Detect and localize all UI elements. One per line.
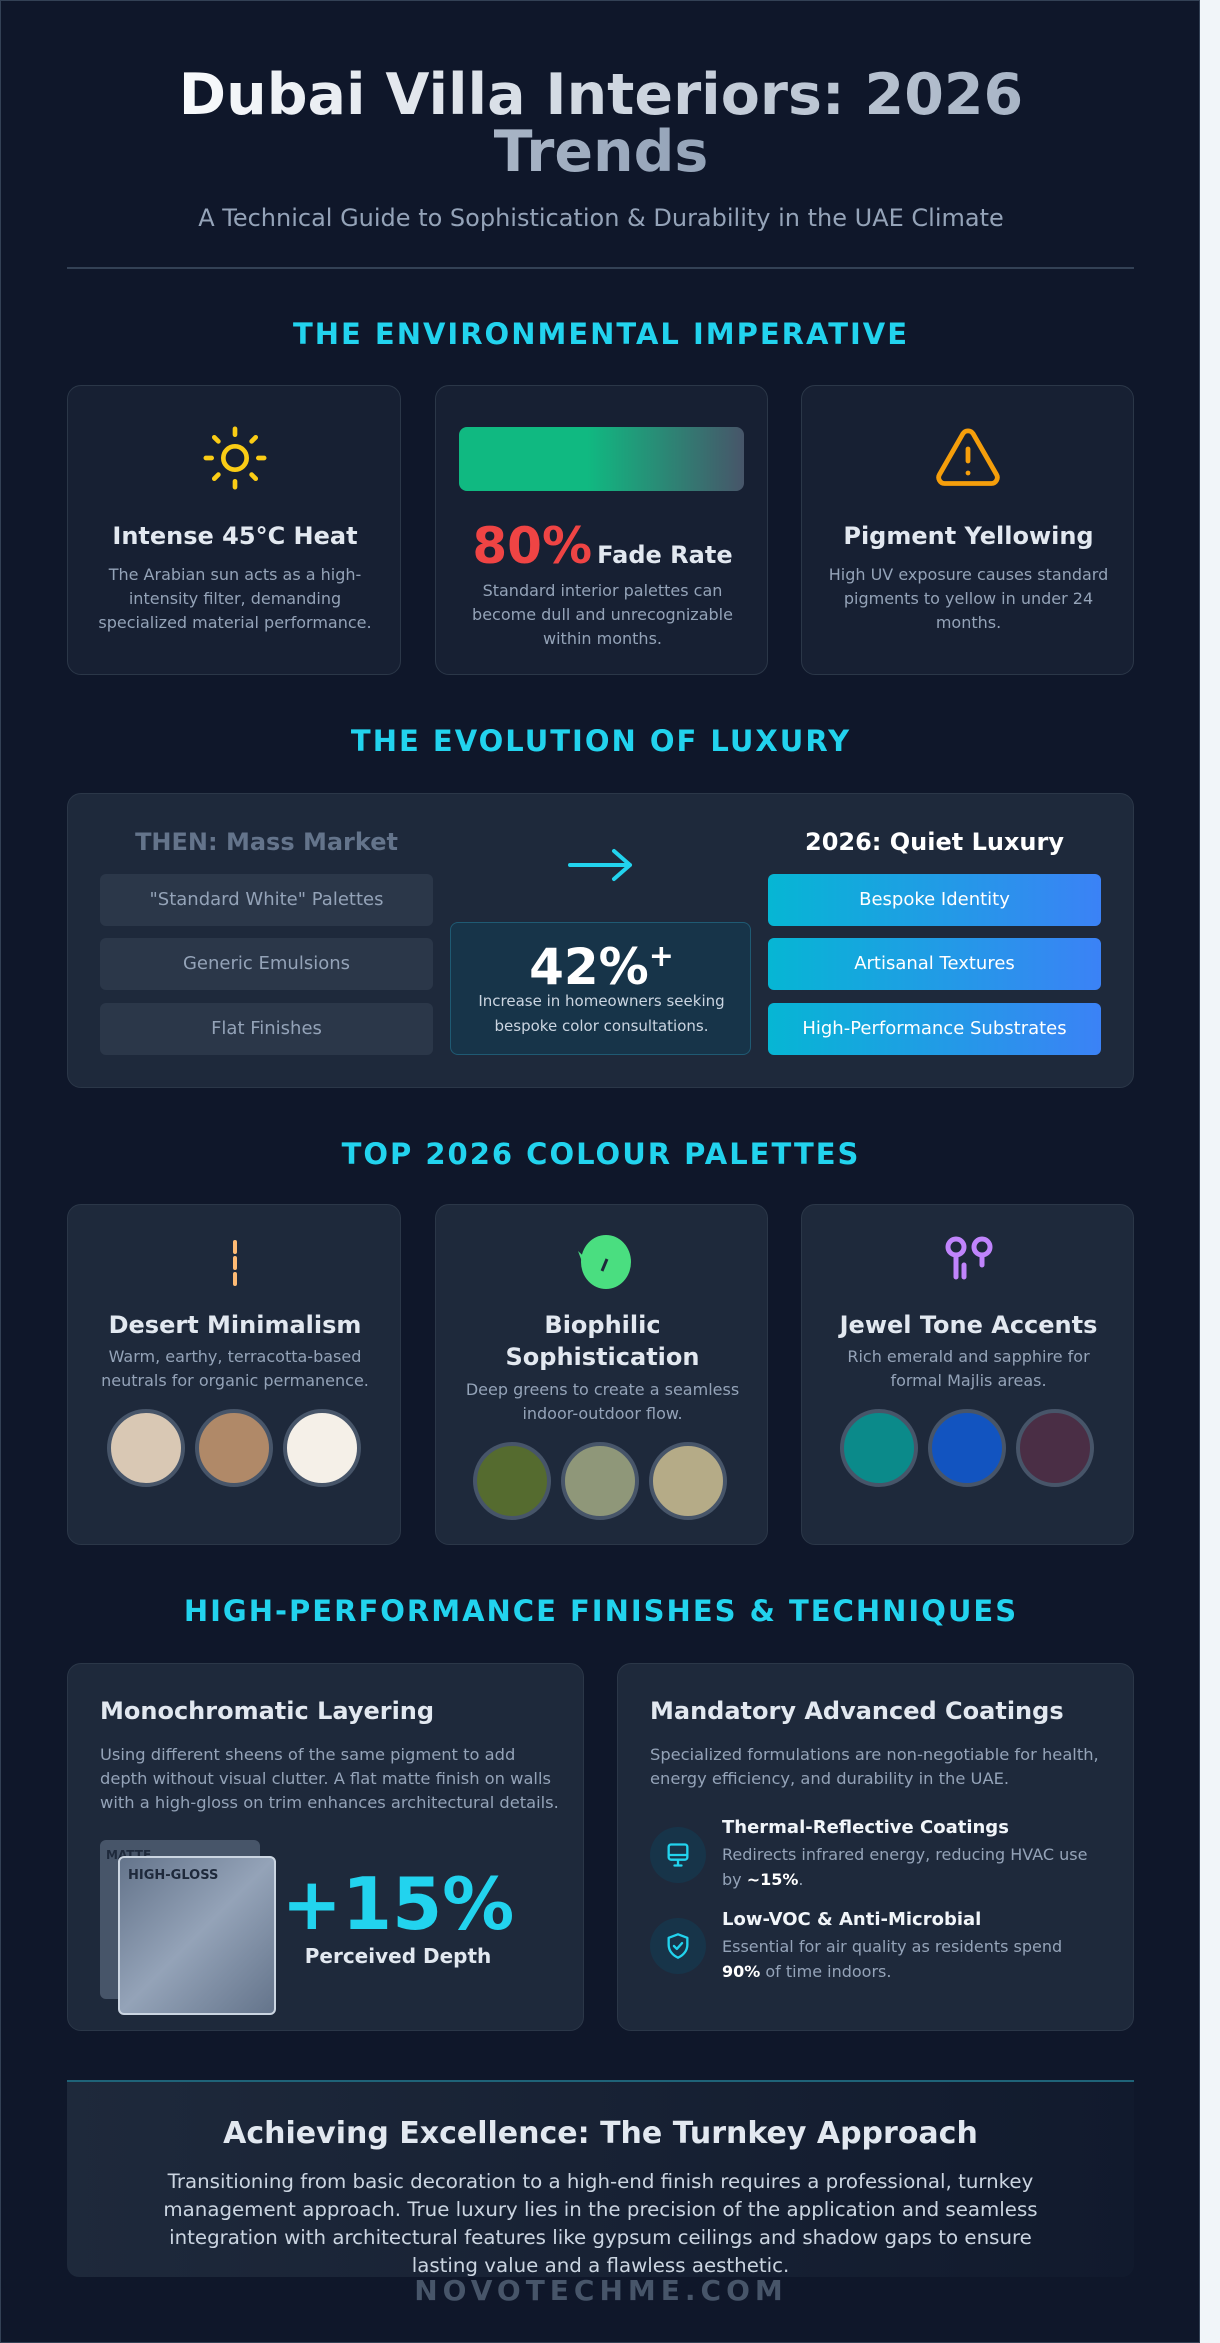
item: [100, 938, 433, 990]
card text: Deep greens to create a seamless: [466, 1380, 739, 1399]
item: low-voc: [650, 1909, 1062, 1981]
now column: [768, 828, 1101, 1055]
arrow: [568, 848, 632, 882]
card text: [650, 1745, 1099, 1788]
card text: become dull and unrecognizable: [472, 605, 733, 624]
card text: [466, 1380, 739, 1423]
card text: [829, 565, 1108, 632]
footer text: integration with architectural features like gypsum ceilings and shadow gaps to ensure: [169, 2226, 1032, 2249]
card text: specialized material performance.: [98, 613, 372, 632]
swatches: [840, 1409, 1094, 1487]
panel: fade rate: [435, 385, 768, 675]
card text: Rich emerald and sapphire for: [847, 1347, 1090, 1366]
item: Flat Finishes: [211, 1018, 322, 1039]
footer heading: Achieving Excellence: The Turnkey Approach: [223, 2116, 978, 2151]
panel: biophilic: [435, 1204, 768, 1545]
card title: Intense 45°C Heat: [112, 522, 358, 550]
icon: shield: [650, 1918, 706, 1974]
title: [179, 62, 1023, 185]
card text: [98, 565, 372, 632]
icon: dashed line: [233, 1240, 237, 1286]
card title: Jewel Tone Accents: [840, 1311, 1097, 1339]
item: thermal: by ~15%.: [722, 1870, 804, 1889]
card text: intensity filter, demanding: [129, 589, 341, 608]
swatch: matte: [100, 1840, 260, 1999]
swatch: high-gloss: [118, 1856, 276, 2015]
item: thermal: Thermal-Reflective Coatings: [722, 1817, 1009, 1838]
card title: Pigment Yellowing: [843, 522, 1094, 550]
card title: [506, 1311, 699, 1371]
card text: within months.: [543, 629, 662, 648]
card text: neutrals for organic permanence.: [101, 1371, 369, 1390]
item: low-voc: Essential for air quality as residents spend: [722, 1937, 1062, 1956]
card title: Mandatory Advanced Coatings: [650, 1697, 1064, 1725]
card text: formal Majlis areas.: [890, 1371, 1047, 1390]
swatch: matte: MATTE: [106, 1848, 151, 1862]
icon: monitor: [650, 1827, 706, 1883]
footer text: management approach. True luxury lies in the precision of the application and seamless: [163, 2198, 1038, 2221]
swatches: [107, 1409, 361, 1487]
stat box: 42%: Increase in homeowners seeking: [478, 992, 725, 1010]
stat: 80%: 80% Fade Rate: [472, 517, 733, 575]
footer text: [163, 2170, 1038, 2277]
icon: leaf: [578, 1235, 631, 1289]
now heading: 2026: Quiet Luxury: [805, 828, 1064, 856]
card title: Desert Minimalism: [109, 1311, 361, 1339]
card text: Warm, earthy, terracotta-based: [109, 1347, 361, 1366]
card text: [100, 1745, 559, 1812]
item: Artisanal Textures: [854, 953, 1015, 974]
panel: advanced coatings: [617, 1663, 1134, 2031]
section heading: environmental imperative: THE ENVIRONMENTAL IMPERATIVE: [293, 317, 909, 351]
item: Bespoke Identity: [859, 889, 1010, 910]
brand watermark: NOVOTECHME.COM: [414, 2274, 788, 2307]
panel: yellowing: [801, 385, 1134, 675]
stat box: 42%: 42%+: [529, 938, 674, 996]
card text: indoor-outdoor flow.: [522, 1404, 683, 1423]
item: [100, 874, 433, 926]
stat box: 42%: [450, 922, 751, 1055]
subtitle: A Technical Guide to Sophistication & Durability in the UAE Climate: [198, 204, 1004, 232]
panel: monochromatic layering: [67, 1663, 584, 2031]
item: "Standard White" Palettes: [150, 889, 383, 910]
title: Dubai Villa Interiors: 2026: [179, 62, 1023, 128]
footer text: Transitioning from basic decoration to a high-end finish requires a professional, turnkey: [168, 2170, 1033, 2193]
section heading: palettes: TOP 2026 COLOUR PALETTES: [342, 1137, 860, 1171]
item: low-voc: 90% of time indoors.: [722, 1962, 891, 1981]
then heading: THEN: Mass Market: [135, 828, 398, 856]
card text: pigments to yellow in under 24: [844, 589, 1093, 608]
footer callout: turnkey approach: [67, 2080, 1134, 2277]
card text: [847, 1347, 1090, 1390]
item: [768, 874, 1101, 926]
item: High-Performance Substrates: [802, 1018, 1067, 1039]
card text: months.: [936, 613, 1001, 632]
card text: The Arabian sun acts as a high-: [109, 565, 361, 584]
swatch: high-gloss: HIGH-GLOSS: [128, 1868, 218, 1883]
section heading: evolution: THE EVOLUTION OF LUXURY: [351, 724, 851, 758]
item: thermal: Redirects infrared energy, reducing HVAC use: [722, 1845, 1087, 1864]
card text: Using different sheens of the same pigment to add: [100, 1745, 515, 1764]
fade bar: [459, 427, 744, 491]
card text: with a high-gloss on trim enhances architectural details.: [100, 1793, 559, 1812]
stat: +15%: +15%: [282, 1862, 514, 1946]
stat box: 42%: bespoke color consultations.: [495, 1017, 708, 1035]
icon: sun: [204, 426, 266, 490]
item: low-voc: Low-VOC & Anti-Microbial: [722, 1909, 981, 1930]
item: thermal: [650, 1817, 1087, 1889]
stat label: Perceived Depth: [305, 1944, 491, 1968]
card text: depth without visual clutter. A flat matte finish on walls: [100, 1769, 551, 1788]
card text: energy efficiency, and durability in the UAE.: [650, 1769, 1009, 1788]
panel: desert minimalism: [67, 1204, 401, 1545]
card title: Sophistication: [506, 1343, 699, 1371]
item: [768, 1003, 1101, 1055]
panel: jewel tones: [801, 1204, 1134, 1545]
panel: evolution of luxury: [67, 793, 1134, 1088]
card text: Standard interior palettes can: [483, 581, 722, 600]
card text: Specialized formulations are non-negotiable for health,: [650, 1745, 1099, 1764]
panel: heat: [67, 385, 401, 675]
item: [768, 938, 1101, 990]
card title: Biophilic: [544, 1311, 661, 1339]
card text: [472, 581, 733, 648]
card text: [101, 1347, 369, 1390]
item: [100, 1003, 433, 1055]
icon: warning: [936, 428, 1000, 486]
card text: High UV exposure causes standard: [829, 565, 1108, 584]
title: Trends: [494, 119, 708, 185]
footer text: lasting value and a flawless aesthetic.: [412, 2254, 789, 2277]
section heading: finishes: HIGH-PERFORMANCE FINISHES & TECHNIQUES: [184, 1594, 1018, 1628]
card title: Monochromatic Layering: [100, 1697, 434, 1725]
swatches: [473, 1442, 727, 1520]
icon: keys: [946, 1236, 992, 1280]
item: Generic Emulsions: [183, 953, 350, 974]
then column: [100, 828, 433, 1055]
